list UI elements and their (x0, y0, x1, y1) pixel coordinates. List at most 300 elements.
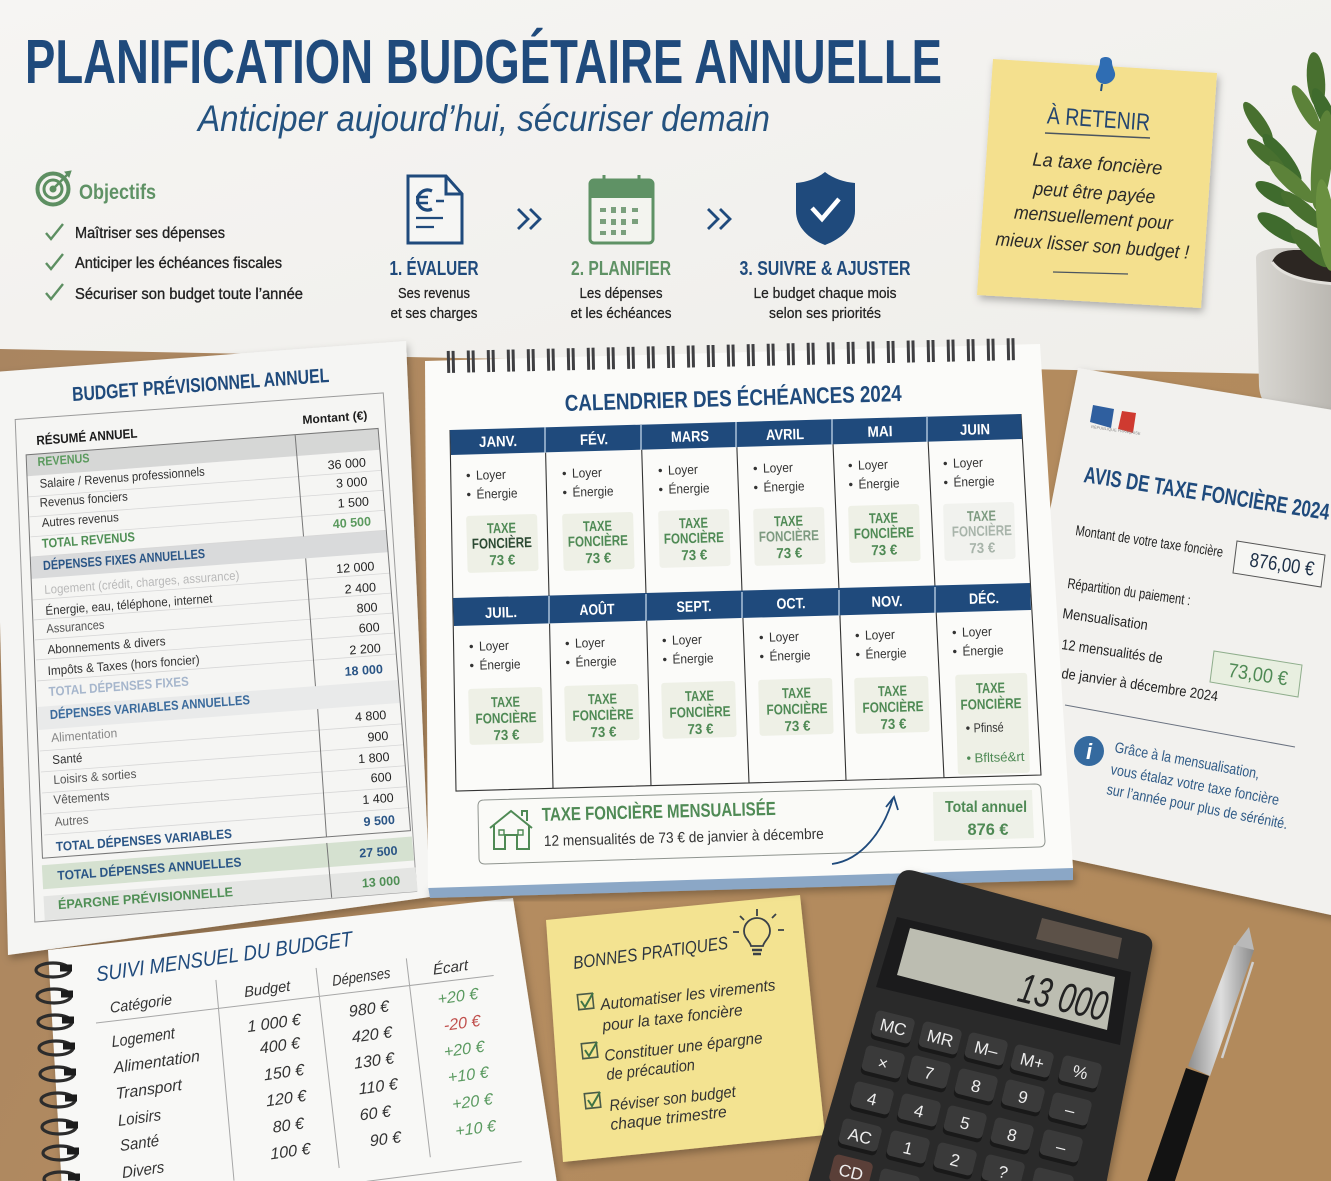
month: février: 73 € (585, 551, 612, 567)
column headers: Dépenses (332, 965, 391, 990)
calculator keys: 1 (901, 1138, 915, 1159)
month: mai (846, 422, 921, 563)
table: revenus: REVENUS (37, 451, 90, 469)
month: février: • (562, 466, 567, 481)
calculator keys: × (876, 1053, 890, 1074)
month: septembre: Loyer (672, 632, 703, 648)
step 1 text: et ses charges (390, 305, 478, 322)
objectives list: Anticiper les échéances fiscales (75, 255, 282, 272)
icon: target (38, 171, 71, 204)
plant (1239, 51, 1331, 410)
table: dépenses fixes: DÉPENSES FIXES ANNUELLES (43, 546, 206, 573)
calculator keys: % (1070, 1061, 1090, 1084)
month: avril: AVRIL (766, 426, 804, 444)
month: mars: 73 € (681, 548, 708, 564)
arrow: curved to december (832, 797, 898, 864)
payment details: Répartition du paiement : (1066, 576, 1191, 609)
month: juin: FONCIÈRE (952, 522, 1012, 541)
icon: light bulb (733, 909, 784, 954)
banner text: 12 mensualités de 73 € de janvier à décembre (544, 826, 824, 850)
month: décembre: Bfltsé&rt (974, 749, 1025, 765)
month: octobre: • (759, 630, 764, 645)
month: mai: • (848, 477, 854, 492)
month: juin: • (943, 475, 949, 490)
month: avril: Loyer (763, 460, 794, 476)
month: mai: TAXE (869, 511, 898, 527)
calendar grid lines (450, 414, 1041, 791)
category list: Alimentation (112, 1047, 201, 1077)
month: mars: MARS (671, 428, 709, 446)
table: dépenses fixes: 600 (358, 620, 380, 636)
budget column: 100 € (270, 1140, 312, 1163)
payment details: 12 mensualités de (1060, 637, 1164, 667)
month: février (560, 430, 635, 571)
objectives block (38, 171, 303, 303)
table: dépenses fixes: 2 400 (344, 580, 376, 597)
month: août: FONCIÈRE (572, 706, 634, 725)
note text: peut être payée (1032, 179, 1156, 208)
month: mai: Énergie (858, 475, 900, 492)
step 2 text: et les échéances (570, 305, 672, 322)
month: juin: JUIN (960, 421, 990, 439)
sticky note: à retenir (977, 57, 1217, 308)
annual total: 876 € (968, 820, 1009, 839)
month: mai: • (848, 458, 853, 473)
step 2 text: Les dépenses (580, 285, 662, 302)
month: septembre: • (662, 652, 668, 667)
month: septembre: • (662, 633, 667, 648)
note heading: À RETENIR (1046, 102, 1151, 137)
calculator (806, 870, 1152, 1181)
icon: document euro (408, 176, 462, 243)
month: décembre: DÉC. (969, 590, 999, 608)
month: novembre: 73 € (880, 717, 907, 733)
month: septembre: 73 € (687, 722, 714, 738)
step 3 text: selon ses priorités (769, 305, 881, 322)
month: juillet: FONCIÈRE (475, 709, 537, 728)
month: janvier: 73 € (489, 553, 516, 569)
note text: mieux lisser son budget ! (995, 229, 1191, 264)
table: dépenses variables: Autres (54, 813, 89, 829)
dépenses column: 110 € (358, 1075, 399, 1098)
practices list: Automatiser les virements (599, 977, 776, 1014)
table: dépenses fixes: 2 200 (349, 641, 381, 657)
month: février: TAXE (583, 519, 612, 535)
month: juin (941, 420, 1016, 561)
month: juin: TAXE (967, 508, 996, 525)
arrow: chevrons 2 (708, 209, 730, 229)
table: dépenses fixes: 800 (356, 600, 378, 616)
calculator keys: 7 (922, 1063, 936, 1084)
table: revenus: Autres revenus (41, 510, 119, 530)
total box (933, 790, 1034, 841)
practices list: Réviser son budget (609, 1084, 737, 1115)
table: dépenses variables (49, 682, 395, 854)
month: septembre (659, 597, 737, 739)
step 2 text (570, 285, 672, 322)
table: totals: TOTAL DÉPENSES ANNUELLES (57, 854, 242, 883)
table: dépenses variables: 4 800 (355, 708, 387, 724)
table: revenus: Salaire / Revenus professionnels (39, 465, 205, 491)
month: mai: Loyer (858, 457, 889, 473)
payment details: Mensualisation (1061, 606, 1149, 634)
calculator keys: MC (878, 1015, 908, 1040)
annual total: Total annuel (945, 799, 1027, 816)
month: novembre (852, 592, 930, 734)
practices list: Constituer une épargne (604, 1030, 764, 1065)
month: mars (656, 427, 731, 568)
notebook spiral (36, 963, 80, 1181)
month: février: Loyer (572, 465, 603, 481)
month: janvier: TAXE (487, 521, 516, 537)
table: revenus: 40 500 (332, 514, 371, 531)
calculator keys: – (1054, 1137, 1068, 1158)
écart column: -20 € (443, 1012, 482, 1035)
step 2 heading: 2. PLANIFIER (571, 258, 671, 280)
month: août: 73 € (590, 725, 617, 741)
month: janvier: • (466, 468, 471, 483)
table: dépenses fixes: 12 000 (336, 559, 375, 576)
month: décembre: Pfinsé (973, 720, 1004, 735)
dépenses column: 980 € (348, 997, 391, 1021)
month: octobre: 73 € (784, 719, 811, 735)
month: avril: • (753, 461, 758, 476)
month: avril: Énergie (763, 478, 805, 495)
month: décembre: Énergie (962, 642, 1004, 659)
month: octobre: • (759, 649, 765, 664)
table: revenus: 36 000 (327, 456, 366, 472)
display value: 13 000 (1014, 964, 1113, 1030)
table: totals: 13 000 (362, 874, 400, 890)
column headers: Écart (432, 957, 470, 979)
month: août: • (565, 655, 571, 670)
calculator keys: 8 (1005, 1125, 1019, 1146)
calculator keys: 4 (865, 1089, 879, 1110)
icon: blue pin (1096, 57, 1115, 91)
month: novembre: • (855, 628, 860, 643)
month: novembre: Énergie (865, 645, 907, 662)
table: revenus: 3 000 (336, 474, 368, 491)
month: juin: 73 € (969, 540, 996, 557)
icon: info (1074, 736, 1104, 766)
month: janvier: FONCIÈRE (472, 534, 532, 553)
month: octobre: FONCIÈRE (766, 700, 828, 719)
month: septembre: TAXE (685, 688, 714, 705)
payment details: de janvier à décembre 2024 (1060, 666, 1219, 705)
month: décembre: Loyer (962, 624, 993, 640)
icon: house (490, 811, 532, 849)
table: dépenses variables: Santé (52, 751, 83, 767)
budget column: 400 € (259, 1034, 302, 1058)
table: dépenses variables: DÉPENSES VARIABLES ANNUELLES (50, 692, 251, 722)
table: dépenses variables: 1 400 (362, 791, 394, 807)
month: septembre: FONCIÈRE (669, 703, 731, 722)
suivi title: SUIVI MENSUEL DU BUDGET (95, 928, 355, 986)
month: décembre: FONCIÈRE (960, 695, 1022, 714)
practices list: de précaution (606, 1057, 696, 1084)
table header (36, 408, 368, 448)
calculator keys (828, 1010, 1103, 1181)
month: octobre (756, 594, 834, 736)
month: mars: TAXE (679, 516, 708, 532)
month: décembre: • (952, 644, 958, 659)
column headers: Budget (244, 978, 292, 1001)
month: août: Loyer (575, 635, 606, 651)
month: novembre: TAXE (878, 683, 907, 700)
écart column: +20 € (437, 985, 480, 1008)
table: dépenses variables: 9 500 (363, 813, 395, 829)
month: juillet: • (469, 639, 474, 654)
icon: french flag (1090, 405, 1141, 436)
month: avril: 73 € (776, 546, 803, 562)
month: avril: FONCIÈRE (759, 527, 819, 546)
calculator keys: 5 (958, 1113, 972, 1134)
budget title: BUDGET PRÉVISIONNEL ANNUEL (72, 364, 330, 406)
dépenses column: 130 € (353, 1049, 396, 1073)
monthly amount box: 73,00 € (1227, 660, 1289, 690)
month: août: • (565, 636, 570, 651)
month: novembre: Loyer (865, 627, 896, 643)
step 3: suivre (740, 172, 911, 322)
step 2: planifier (570, 175, 672, 322)
month: janvier: • (466, 487, 472, 502)
panel: suivi mensuel notebook (36, 898, 558, 1181)
table: dépenses fixes: Impôts & Taxes (hors foncier) (47, 653, 200, 678)
table: dépenses fixes: Assurances (46, 618, 105, 636)
panel: calendrier des échéances (425, 344, 1073, 898)
month: mars: Énergie (668, 480, 710, 497)
écart column: +20 € (443, 1037, 486, 1061)
info text: sur l’année pour plus de sérénité. (1105, 781, 1289, 833)
info text: Grâce à la mensualisation, (1113, 739, 1261, 783)
table: revenus: 1 500 (337, 494, 369, 511)
month: juillet: 73 € (493, 728, 520, 744)
table: totals: 27 500 (359, 844, 398, 861)
table: dépenses variables: Vêtements (53, 789, 110, 807)
dépenses column: 90 € (369, 1128, 403, 1150)
table header: Montant (€) (302, 408, 368, 427)
note text: La taxe foncière (1032, 150, 1163, 180)
plant pot (1256, 248, 1331, 410)
page stack edge (428, 866, 1073, 898)
budget column: 80 € (272, 1114, 306, 1137)
month: mai: FONCIÈRE (854, 524, 914, 543)
sticky note: bonnes pratiques (546, 895, 825, 1162)
amount box (1233, 541, 1325, 587)
table: dépenses variables: 600 (370, 770, 392, 785)
category list: Loisirs (117, 1106, 162, 1130)
practices list: chaque trimestre (610, 1104, 728, 1134)
month: novembre: NOV. (871, 593, 903, 611)
month: octobre: Énergie (769, 647, 811, 664)
month: juin: Énergie (953, 473, 995, 490)
month: mars: • (658, 482, 664, 497)
banner heading: TAXE FONCIÈRE MENSUALISÉE (542, 798, 776, 826)
table: dépenses variables: Loisirs & sorties (53, 767, 137, 787)
display screen (897, 928, 1115, 1030)
info text (1105, 739, 1289, 833)
pen (1144, 927, 1254, 1181)
annual total (945, 799, 1027, 839)
calculator keys: – (1063, 1100, 1077, 1121)
budget column (247, 1011, 313, 1165)
month: décembre: • (966, 750, 972, 766)
header row: first semester (450, 414, 1022, 455)
month: février: Énergie (572, 483, 614, 500)
écart column: +10 € (455, 1117, 498, 1140)
calculator keys: 9 (1016, 1087, 1030, 1108)
amount label: Montant de votre taxe foncière (1074, 523, 1224, 561)
note title: BONNES PRATIQUES (572, 933, 729, 973)
month: décembre: • (952, 625, 957, 640)
column headers: Catégorie (109, 991, 173, 1017)
month: janvier: Énergie (476, 485, 518, 502)
month: mai: MAI (867, 423, 893, 441)
month: juillet: • (469, 658, 475, 673)
month: mai: 73 € (871, 543, 898, 559)
objectives heading: Objectifs (79, 181, 156, 204)
table: dépenses fixes: 18 000 (344, 662, 383, 679)
month: janvier: JANV. (479, 433, 517, 451)
month: janvier: Loyer (476, 467, 507, 483)
calendar title: CALENDRIER DES ÉCHÉANCES 2024 (564, 379, 902, 416)
icon: calendar (590, 175, 653, 243)
calculator keys: 8 (969, 1076, 983, 1097)
month: décembre (951, 589, 1030, 775)
table: totals (56, 843, 400, 913)
dépenses column: 420 € (351, 1023, 394, 1047)
month: septembre: SEPT. (676, 598, 712, 616)
month: août: TAXE (588, 691, 617, 708)
objectives list: Maîtriser ses dépenses (75, 225, 225, 242)
dépenses column: 60 € (359, 1102, 393, 1125)
month: juillet (466, 603, 544, 745)
table: totals: ÉPARGNE PRÉVISIONNELLE (58, 884, 234, 912)
month: mars: Loyer (668, 462, 699, 478)
calculator keys: MR (925, 1026, 955, 1051)
table: dépenses fixes (42, 533, 383, 701)
écart column: +20 € (451, 1090, 494, 1114)
month: juillet: JUIL. (485, 604, 517, 622)
table: dépenses variables: 900 (367, 729, 389, 744)
month: février: FONCIÈRE (568, 532, 628, 551)
month: avril (751, 425, 826, 566)
wall background (0, 0, 1331, 375)
info text: vous étalaz votre taxe foncière (1109, 761, 1281, 809)
month: juillet: TAXE (491, 695, 521, 711)
note text: mensuellement pour (1013, 202, 1174, 235)
calculator keys: M– (972, 1037, 1000, 1062)
category list: Logement (111, 1024, 177, 1051)
solar panel (1036, 918, 1122, 959)
table: dépenses fixes: Énergie, eau, téléphone, internet (45, 590, 213, 618)
month: avril: TAXE (774, 514, 803, 530)
panel: avis de taxe foncière (985, 368, 1331, 918)
month: août: AOÛT (579, 600, 615, 619)
table frame and bands (8, 391, 418, 922)
budget column: 1 000 € (247, 1011, 302, 1036)
table: dépenses variables: TOTAL DÉPENSES VARIABLES (56, 826, 233, 854)
objectives list: Sécuriser son budget toute l’année (75, 286, 303, 303)
month: octobre: Loyer (769, 629, 800, 645)
budget column: 120 € (265, 1087, 308, 1110)
table: dépenses variables: 1 800 (358, 750, 390, 766)
note text (995, 150, 1191, 264)
month: juillet: Loyer (479, 638, 510, 654)
month: mars: • (658, 463, 663, 478)
table: revenus: Revenus fonciers (39, 489, 128, 510)
month: février: FÉV. (580, 431, 608, 449)
icon: french flag: RÉPUBLIQUE FRANÇAISE (1091, 424, 1141, 436)
month: novembre: • (855, 647, 861, 662)
month: octobre: TAXE (782, 685, 811, 702)
header row: second semester (453, 583, 1031, 626)
step 3 text (754, 285, 896, 322)
objectives checks (46, 224, 63, 299)
payment details (1060, 576, 1219, 705)
column headers (109, 950, 470, 1024)
plant leaves (1239, 51, 1331, 272)
month: avril: • (753, 480, 759, 495)
category list: Transport (115, 1076, 184, 1103)
arrow: chevrons 1 (518, 209, 540, 229)
month: juillet: Énergie (479, 656, 521, 673)
month: novembre: FONCIÈRE (862, 698, 924, 717)
month: août: Énergie (575, 653, 617, 670)
display frame (876, 917, 1131, 1045)
spiral binding (447, 349, 1022, 362)
practices list: pour la taxe foncière (601, 1002, 744, 1035)
step 1 heading: 1. ÉVALUER (390, 257, 479, 280)
calculator keys: 4 (912, 1101, 926, 1122)
suivi rules (94, 940, 522, 1181)
main title: PLANIFICATION BUDGÉTAIRE ANNUELLE (25, 28, 942, 97)
table header: RÉSUMÉ ANNUEL (36, 425, 138, 448)
icon: info: i (1086, 739, 1093, 764)
step 1: évaluer (390, 176, 479, 322)
month: janvier (464, 432, 539, 573)
dépenses column (348, 997, 404, 1152)
month: octobre: OCT. (776, 595, 806, 613)
calculator keys: M+ (1018, 1049, 1046, 1074)
month: juin: • (943, 456, 948, 471)
month: décembre: TAXE (976, 680, 1005, 697)
month: juin: Loyer (953, 455, 984, 471)
wooden desk (0, 340, 1331, 1181)
icon: shield check (796, 172, 855, 245)
écart column: +10 € (447, 1063, 490, 1087)
banner: taxe foncière mensualisée (478, 784, 1045, 864)
table: revenus: TOTAL REVENUS (41, 529, 136, 551)
monthly amount box (1210, 651, 1302, 697)
step 3 text: Le budget chaque mois (754, 285, 896, 302)
amount box: 876,00 € (1248, 549, 1316, 581)
category list: Santé (119, 1132, 160, 1155)
heading underline (1045, 133, 1150, 138)
month: septembre: Énergie (672, 650, 714, 667)
table: revenus (37, 430, 371, 553)
subtitle: Anticiper aujourd’hui, sécuriser demain (196, 98, 770, 139)
budget column: 150 € (263, 1061, 306, 1084)
category list (110, 1021, 209, 1181)
panel: budget prévisionnel (0, 341, 430, 955)
step 3 heading: 3. SUIVRE & AJUSTER (740, 258, 911, 280)
table: dépenses variables: Alimentation (51, 726, 118, 745)
calculator keys: 2 (948, 1150, 962, 1171)
month: février: • (562, 485, 568, 500)
écart column (437, 984, 498, 1141)
table: dépenses fixes: Logement (crédit, charges, assurance) (44, 568, 240, 597)
